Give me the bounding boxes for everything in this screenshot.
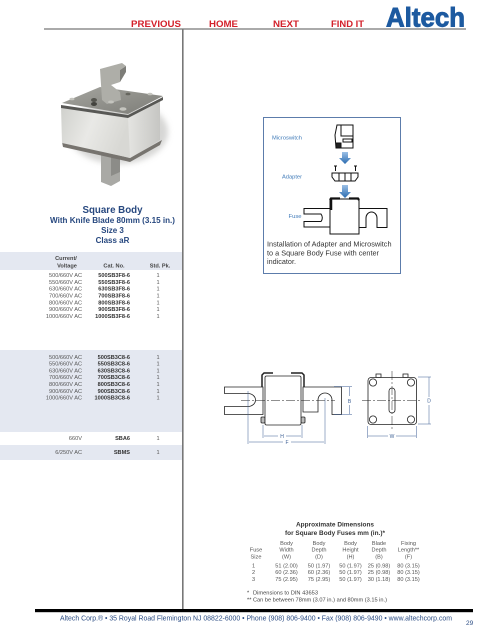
column headers: (B)	[375, 554, 383, 560]
data rows: 75 (2.95)	[308, 577, 330, 583]
table header: Std. Pk.	[150, 264, 171, 270]
table header: Current/	[55, 256, 77, 262]
data rows: 80 (3.15)	[397, 564, 420, 570]
table rows: accessories: 1	[156, 436, 160, 442]
table rows: C8 series: 1000/660V AC	[46, 396, 82, 402]
column headers: (D)	[315, 554, 323, 560]
caption: Installation of Adapter and Microswitch	[267, 242, 392, 248]
table rows: F8 series: 1	[156, 287, 160, 293]
data rows: 60 (2.36)	[308, 570, 330, 576]
column headers: Height	[342, 548, 359, 554]
footnotes	[247, 590, 387, 604]
table rows: F8 series: 550/660V AC	[49, 280, 82, 286]
table rows: accessories: SBMS	[114, 450, 130, 456]
data rows: 50 (1.97)	[308, 564, 330, 570]
table rows: F8 series: 550SB3F8-6	[98, 280, 130, 286]
column headers: Body	[280, 541, 293, 547]
heading: square body: Square Body	[82, 204, 143, 216]
table rows: C8 series: 550SB3C8-6	[98, 362, 130, 368]
icon: fuse side view	[304, 198, 387, 234]
label: Fuse: Fuse	[288, 214, 302, 220]
table header: Voltage	[57, 264, 77, 270]
table rows: C8 series: 630/660V AC	[49, 368, 82, 374]
heading: square body: Size 3	[101, 226, 124, 235]
table rows: F8 series	[46, 273, 160, 320]
table rows: accessories	[55, 436, 160, 456]
label: B: B	[348, 399, 352, 405]
data rows: 50 (1.97)	[339, 564, 362, 570]
footer rule	[35, 609, 473, 612]
table rows: C8 series: 800SB3C8-6	[98, 382, 130, 388]
column headers	[250, 541, 420, 560]
table rows: C8 series: 900/660V AC	[49, 389, 82, 395]
table title: Approximate Dimensions	[296, 522, 374, 528]
column headers: (W)	[282, 554, 291, 560]
data rows: 1	[252, 564, 255, 570]
navigation links: FIND IT	[331, 19, 365, 29]
table rows: C8 series: 800/660V AC	[49, 382, 82, 388]
table rows: F8 series: 1	[156, 307, 160, 313]
table rows: accessories: 660V	[69, 436, 82, 442]
table title: for Square Body Fuses mm (in.)*	[285, 530, 385, 537]
dimensions table	[247, 522, 420, 604]
dimension drawing: side view	[224, 373, 352, 446]
column headers: Length**	[398, 548, 420, 554]
icon: adapter with screws	[332, 166, 358, 181]
table title	[285, 522, 385, 537]
table rows: C8 series: 1	[156, 389, 160, 395]
heading: square body	[50, 204, 175, 245]
arrow: adapter to fuse	[339, 185, 351, 198]
table rows: C8 series: 500/660V AC	[49, 355, 82, 361]
caption	[267, 242, 392, 266]
table rows: accessories: SBA6	[115, 436, 130, 442]
table rows: F8 series: 500/660V AC	[49, 273, 82, 279]
table rows: C8 series: 1	[156, 382, 160, 388]
column headers: Width	[279, 548, 294, 554]
table rows: C8 series: 550/660V AC	[49, 362, 82, 368]
footer contact line: Altech Corp.® • 35 Royal Road Flemington NJ 08822-6000 • Phone (908) 806-9400 • Fax (908) 806-9490 • www.altechcorp.com	[60, 614, 452, 622]
page number: 29	[466, 620, 474, 627]
column headers: Blade	[372, 541, 386, 547]
label: Microswitch: Microswitch	[272, 136, 302, 142]
table header	[55, 256, 171, 270]
heading: square body: With Knife Blade 80mm (3.15 in.)	[50, 216, 175, 225]
table rows: F8 series: 700/660V AC	[49, 294, 82, 300]
table rows: F8 series: 630SB3F8-6	[98, 287, 130, 293]
column headers: Fixing	[401, 541, 416, 547]
footnotes: *	[247, 590, 250, 596]
column headers: Body	[313, 541, 326, 547]
data rows: 30 (1.18)	[368, 577, 390, 583]
logo: Altech: Altech	[386, 2, 465, 32]
data rows: 25 (0.98)	[368, 570, 390, 576]
footnotes: ** Can be between 78mm (3.07 in.) and 80mm (3.15 in.)	[247, 598, 387, 604]
data rows: 50 (1.97)	[339, 570, 362, 576]
table rows: C8 series: 630SB3C8-6	[98, 368, 130, 374]
column headers: Fuse	[250, 548, 262, 554]
data rows: 2	[252, 570, 255, 576]
table rows: F8 series: 900/660V AC	[49, 307, 82, 313]
table rows: F8 series: 1	[156, 300, 160, 306]
navigation links: NEXT	[273, 19, 300, 29]
column headers: Size	[251, 554, 261, 560]
table rows: F8 series: 630/660V AC	[49, 287, 82, 293]
footnotes: Dimensions to DIN 43653	[253, 590, 318, 596]
label: F: F	[285, 440, 289, 446]
column headers: Body	[344, 541, 357, 547]
data rows: 80 (3.15)	[397, 570, 420, 576]
table rows: C8 series: 1	[156, 375, 160, 381]
table rows: F8 series: 1	[156, 273, 160, 279]
column headers: Depth	[312, 548, 326, 554]
product photo: square body fuse	[61, 63, 168, 186]
table rows: C8 series	[46, 355, 160, 402]
table rows: C8 series: 1	[156, 368, 160, 374]
navigation links: HOME	[209, 19, 238, 29]
data rows	[252, 564, 420, 583]
table rows: F8 series: 1000/660V AC	[46, 314, 82, 320]
installation panel	[264, 118, 400, 274]
label: D: D	[427, 398, 431, 404]
heading: square body: Class aR	[96, 236, 130, 245]
table rows: F8 series: 1000SB3F8-6	[95, 314, 130, 320]
data rows: 51 (2.00)	[275, 564, 298, 570]
table rows: C8 series: 1	[156, 355, 160, 361]
table header: Cat. No.	[103, 264, 125, 270]
column headers: Depth	[372, 548, 386, 554]
data rows: 25 (0.98)	[368, 564, 390, 570]
column headers: (H)	[347, 554, 355, 560]
navigation links: PREVIOUS	[131, 19, 181, 29]
data rows: 75 (2.95)	[275, 577, 298, 583]
table rows: F8 series: 900SB3F8-6	[98, 307, 130, 313]
table rows: C8 series: 700/660V AC	[49, 375, 82, 381]
data rows: 60 (2.36)	[275, 570, 298, 576]
table rows: F8 series: 800/660V AC	[49, 300, 82, 306]
column headers: (F)	[405, 554, 412, 560]
table background bands	[0, 252, 182, 460]
table rows: F8 series: 1	[156, 294, 160, 300]
icon: microswitch	[335, 125, 353, 148]
label: W: W	[390, 434, 395, 440]
table rows: C8 series: 1	[156, 362, 160, 368]
table rows: C8 series: 700SB3C8-6	[98, 375, 130, 381]
navigation links	[131, 19, 365, 29]
table rows: accessories: 1	[156, 450, 160, 456]
label: H: H	[280, 434, 284, 440]
table rows: C8 series: 1	[156, 396, 160, 402]
column divider	[182, 29, 184, 610]
data rows: 50 (1.97)	[339, 577, 362, 583]
table rows: F8 series: 700SB3F8-6	[98, 294, 130, 300]
caption: indicator.	[267, 259, 296, 266]
table rows: C8 series: 1000SB3C8-6	[95, 396, 130, 402]
table rows: C8 series: 500SB3C8-6	[98, 355, 130, 361]
data rows: 80 (3.15)	[397, 577, 420, 583]
dimension drawing: top view	[362, 371, 431, 440]
label: Adapter: Adapter	[282, 175, 302, 181]
table rows: C8 series: 900SB3C8-6	[98, 389, 130, 395]
caption: to a Square Body Fuse with center	[267, 250, 380, 257]
table rows: F8 series: 500SB3F8-6	[98, 273, 130, 279]
arrow: microswitch to adapter	[339, 152, 351, 164]
table rows: F8 series: 1	[156, 314, 160, 320]
data rows: 3	[252, 577, 255, 583]
table rows: F8 series: 1	[156, 280, 160, 286]
table rows: F8 series: 800SB3F8-6	[98, 300, 130, 306]
header rule	[44, 28, 466, 30]
table rows: accessories: 6/250V AC	[55, 450, 82, 456]
